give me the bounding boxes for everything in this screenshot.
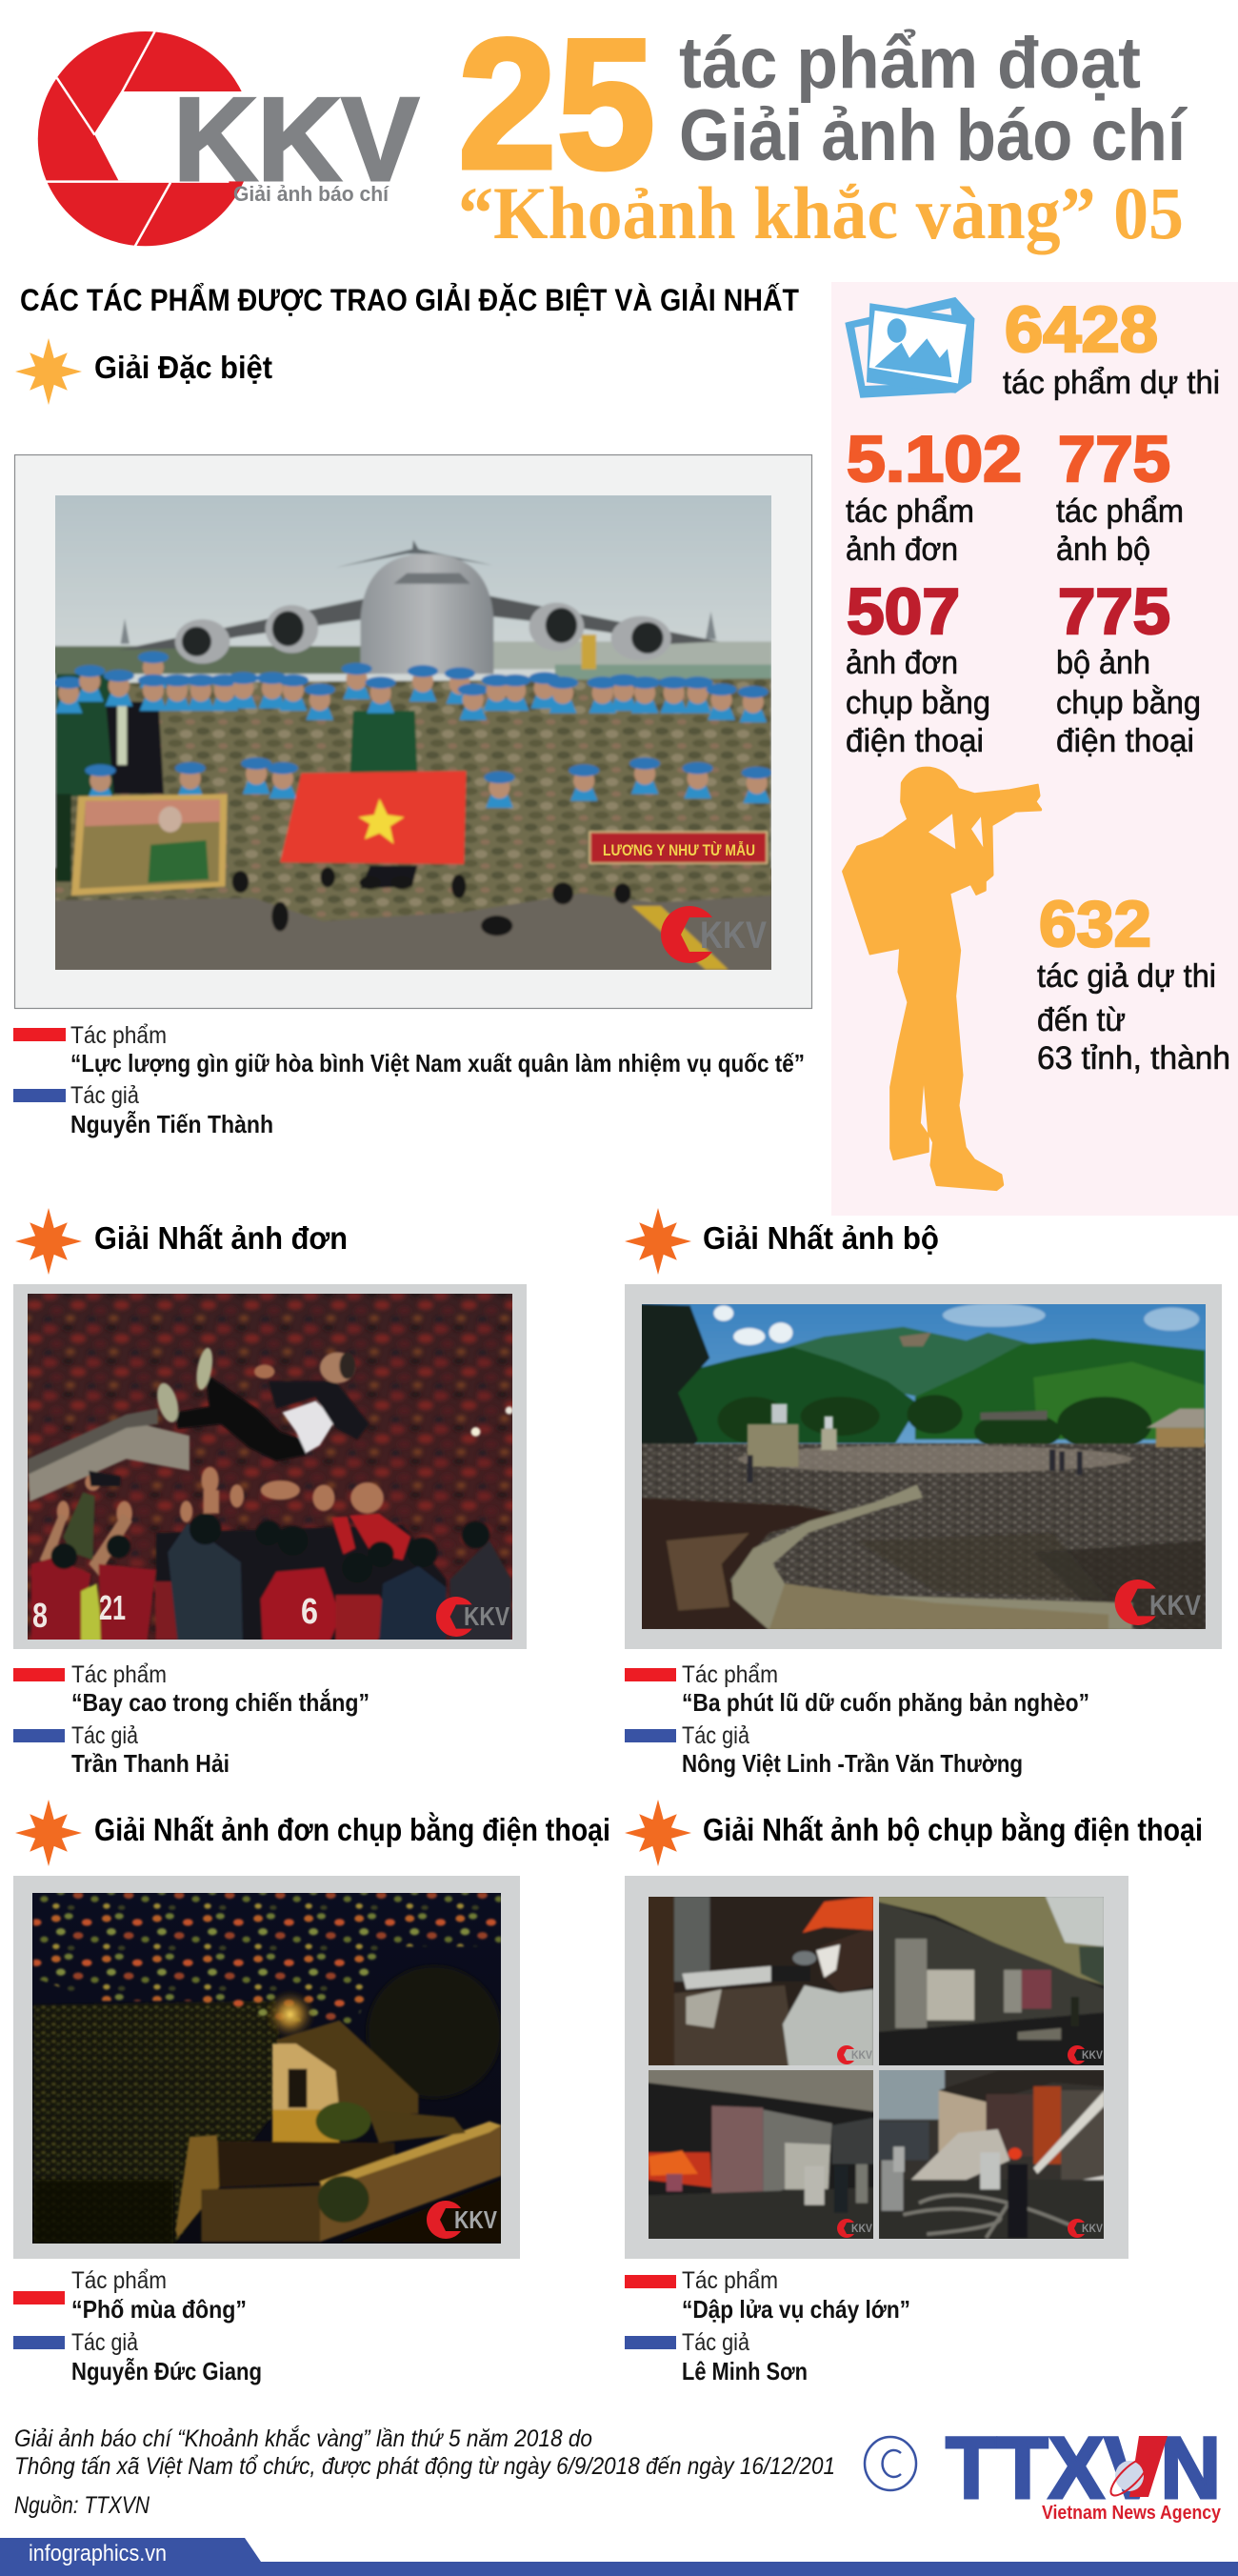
icon: copyright	[865, 2437, 916, 2490]
watermark	[436, 1597, 509, 1637]
photo frame	[625, 1284, 1222, 1649]
stat: phone series: bộ ảnh	[1056, 645, 1150, 681]
footer note	[14, 2425, 835, 2519]
caption: Lê Minh Sơn	[682, 2357, 808, 2385]
section heading: CÁC TÁC PHẨM ĐƯỢC TRAO GIẢI ĐẶC BIỆT VÀ GIẢI NHẤT	[20, 283, 799, 317]
logo caption: Vietnam News Agency	[1042, 2503, 1222, 2524]
stat: authors: 63 tỉnh, thành	[1037, 1040, 1230, 1077]
watermarks: KKV	[1082, 2222, 1103, 2235]
stat: photo series: ảnh bộ	[1056, 532, 1150, 568]
photo: firefighters with hoses	[877, 2069, 1107, 2242]
caption: “Dập lửa vụ cháy lớn”	[682, 2295, 910, 2324]
photo frame	[625, 1876, 1128, 2259]
photo: flood-ravaged village	[639, 1301, 1208, 1634]
caption: Nông Việt Linh -Trần Văn Thường	[682, 1749, 1023, 1778]
stat: single photos: ảnh đơn	[846, 532, 958, 568]
title line 3: “Khoảnh khắc vàng” 05	[458, 171, 1184, 254]
stat: authors: đến từ	[1037, 1002, 1126, 1038]
jersey numbers	[32, 1595, 317, 1627]
caption: Tác giả	[682, 2329, 749, 2356]
stat: phone single photos	[846, 575, 990, 759]
logo tagline: Giải ảnh báo chí	[233, 182, 389, 206]
title number 25: 25	[458, 1, 655, 208]
stat: authors	[1037, 888, 1230, 1077]
panel: first prize single photo by phone	[13, 1800, 610, 2385]
icon: orange star	[15, 1208, 82, 1275]
photo: firefighter close-up	[647, 1894, 875, 2067]
stat: phone single photos: ảnh đơn	[846, 645, 958, 681]
raised hands	[57, 1467, 384, 1526]
stat: single photos: 5.102	[847, 423, 1022, 495]
photo: coach tossed in the air	[24, 1290, 517, 1643]
stat: photo series: tác phẩm	[1056, 493, 1184, 530]
photo: warehouse fire with flames	[647, 2069, 875, 2242]
caption: “Phố mùa đông”	[71, 2295, 247, 2324]
caption	[13, 1661, 369, 1778]
banner background	[589, 832, 767, 863]
watermark: KKV	[1149, 1590, 1201, 1621]
caption: “Bay cao trong chiến thắng”	[71, 1688, 369, 1717]
caption	[13, 2267, 262, 2385]
caption: Tác phẩm	[71, 2267, 167, 2294]
panel: special prize	[13, 338, 811, 1138]
jersey numbers: 21	[99, 1588, 126, 1627]
jersey numbers: 8	[32, 1596, 48, 1635]
photo frame	[15, 455, 811, 1008]
jersey numbers: 6	[301, 1592, 318, 1632]
title line 1: tác phẩm đoạt	[679, 23, 1141, 104]
caption: special prize: Nguyễn Tiến Thành	[70, 1110, 273, 1138]
caption: Tác phẩm	[71, 1661, 167, 1688]
watermarks: KKV	[1082, 2048, 1103, 2062]
icon: gold star	[15, 338, 82, 405]
logo: TTXVN: TTXVN	[946, 2420, 1221, 2517]
stat: single photos: tác phẩm	[846, 493, 974, 530]
stat: total entries: tác phẩm dự thi	[1003, 365, 1220, 401]
caption: Tác giả	[71, 2329, 138, 2356]
watermarks: KKV	[851, 2048, 872, 2062]
logo: KKV Giải ảnh báo chí	[35, 30, 419, 248]
coach	[175, 1374, 306, 1461]
footer note: Giải ảnh báo chí “Khoảnh khắc vàng” lần thứ 5 năm 2018 do	[14, 2425, 592, 2452]
stat: phone single photos: điện thoại	[846, 723, 984, 759]
footer site label: infographics.vn	[29, 2541, 167, 2566]
caption	[625, 1661, 1089, 1778]
stat: phone series: chụp bằng	[1056, 685, 1201, 721]
caption: Tác phẩm	[682, 1661, 778, 1688]
stat: phone series: 775	[1058, 575, 1170, 648]
stat: total entries	[1003, 293, 1220, 401]
photo: peacekeepers before aircraft	[53, 493, 774, 972]
photo frame	[13, 1876, 520, 2259]
title line 2: Giải ảnh báo chí	[679, 95, 1188, 176]
photo frame	[13, 1284, 527, 1649]
title	[458, 1, 1188, 254]
stat: authors: 632	[1039, 888, 1151, 960]
icon: photographer silhouette	[843, 768, 1041, 1189]
stat: authors: tác giả dự thi	[1037, 958, 1216, 995]
caption: special prize: Tác giả	[70, 1082, 139, 1109]
stat: single photos	[846, 423, 1022, 568]
logo letters: KKV	[173, 74, 419, 206]
footer note: Thông tấn xã Việt Nam tổ chức, được phát động từ ngày 6/9/2018 đến ngày 16/12/201	[14, 2453, 835, 2480]
panel: statistics	[831, 282, 1238, 1216]
stat: photo series: 775	[1058, 423, 1170, 495]
watermarks: KKV	[851, 2222, 872, 2235]
heading: special prize: Giải Đặc biệt	[94, 350, 272, 385]
footer bar	[0, 2538, 1238, 2576]
caption: special prize	[13, 1022, 805, 1138]
watermarks	[837, 2045, 1103, 2238]
banner text: LƯƠNG Y NHƯ TỪ MẪU	[603, 841, 755, 859]
icon: orange star	[15, 1800, 82, 1866]
caption: Tác giả	[71, 1722, 138, 1749]
heading: Giải Nhất ảnh đơn	[94, 1220, 348, 1256]
panel: first prize photo series by phone	[625, 1800, 1203, 2385]
caption: special prize: Tác phẩm	[70, 1022, 167, 1049]
logo aperture	[35, 30, 265, 248]
source: Nguồn: TTXVN	[14, 2492, 150, 2519]
caption: “Ba phút lũ dữ cuốn phăng bản nghèo”	[682, 1688, 1089, 1717]
watermark	[427, 2201, 498, 2239]
caption	[625, 2267, 910, 2385]
caption: special prize: “Lực lượng gìn giữ hòa bình Việt Nam xuất quân làm nhiệm vụ quốc tế”	[70, 1049, 805, 1077]
panel: first prize photo series	[625, 1208, 1222, 1778]
stat: photo series	[1056, 423, 1184, 568]
stat: phone series: điện thoại	[1056, 723, 1194, 759]
stat: total entries: 6428	[1005, 293, 1158, 366]
team	[156, 1525, 446, 1641]
icon: orange star	[625, 1208, 691, 1275]
logo globe	[1106, 2453, 1153, 2501]
watermark: KKV	[700, 915, 767, 956]
painting	[71, 794, 228, 896]
watermark	[661, 906, 767, 963]
panel: first prize single photo	[13, 1208, 527, 1778]
watermark: KKV	[464, 1601, 509, 1631]
stat: phone series	[1056, 575, 1201, 759]
icon: photos	[845, 297, 974, 398]
photo: winter street at night	[30, 1890, 503, 2245]
caption: Tác phẩm	[682, 2267, 778, 2294]
icon: orange star	[625, 1800, 691, 1866]
heading: Giải Nhất ảnh bộ	[703, 1220, 939, 1256]
stat: phone single photos: 507	[847, 575, 960, 648]
watermark: KKV	[454, 2205, 498, 2234]
logo red V accent	[1129, 2436, 1168, 2497]
heading: Giải Nhất ảnh đơn chụp bằng điện thoại	[94, 1812, 610, 1847]
flag	[280, 771, 467, 864]
stat: phone single photos: chụp bằng	[846, 685, 990, 721]
caption: Nguyễn Đức Giang	[71, 2357, 262, 2385]
caption: Trần Thanh Hải	[71, 1749, 230, 1778]
watermark	[1115, 1580, 1201, 1625]
caption: Tác giả	[682, 1722, 749, 1749]
photo: burning warehouse side	[877, 1894, 1107, 2067]
